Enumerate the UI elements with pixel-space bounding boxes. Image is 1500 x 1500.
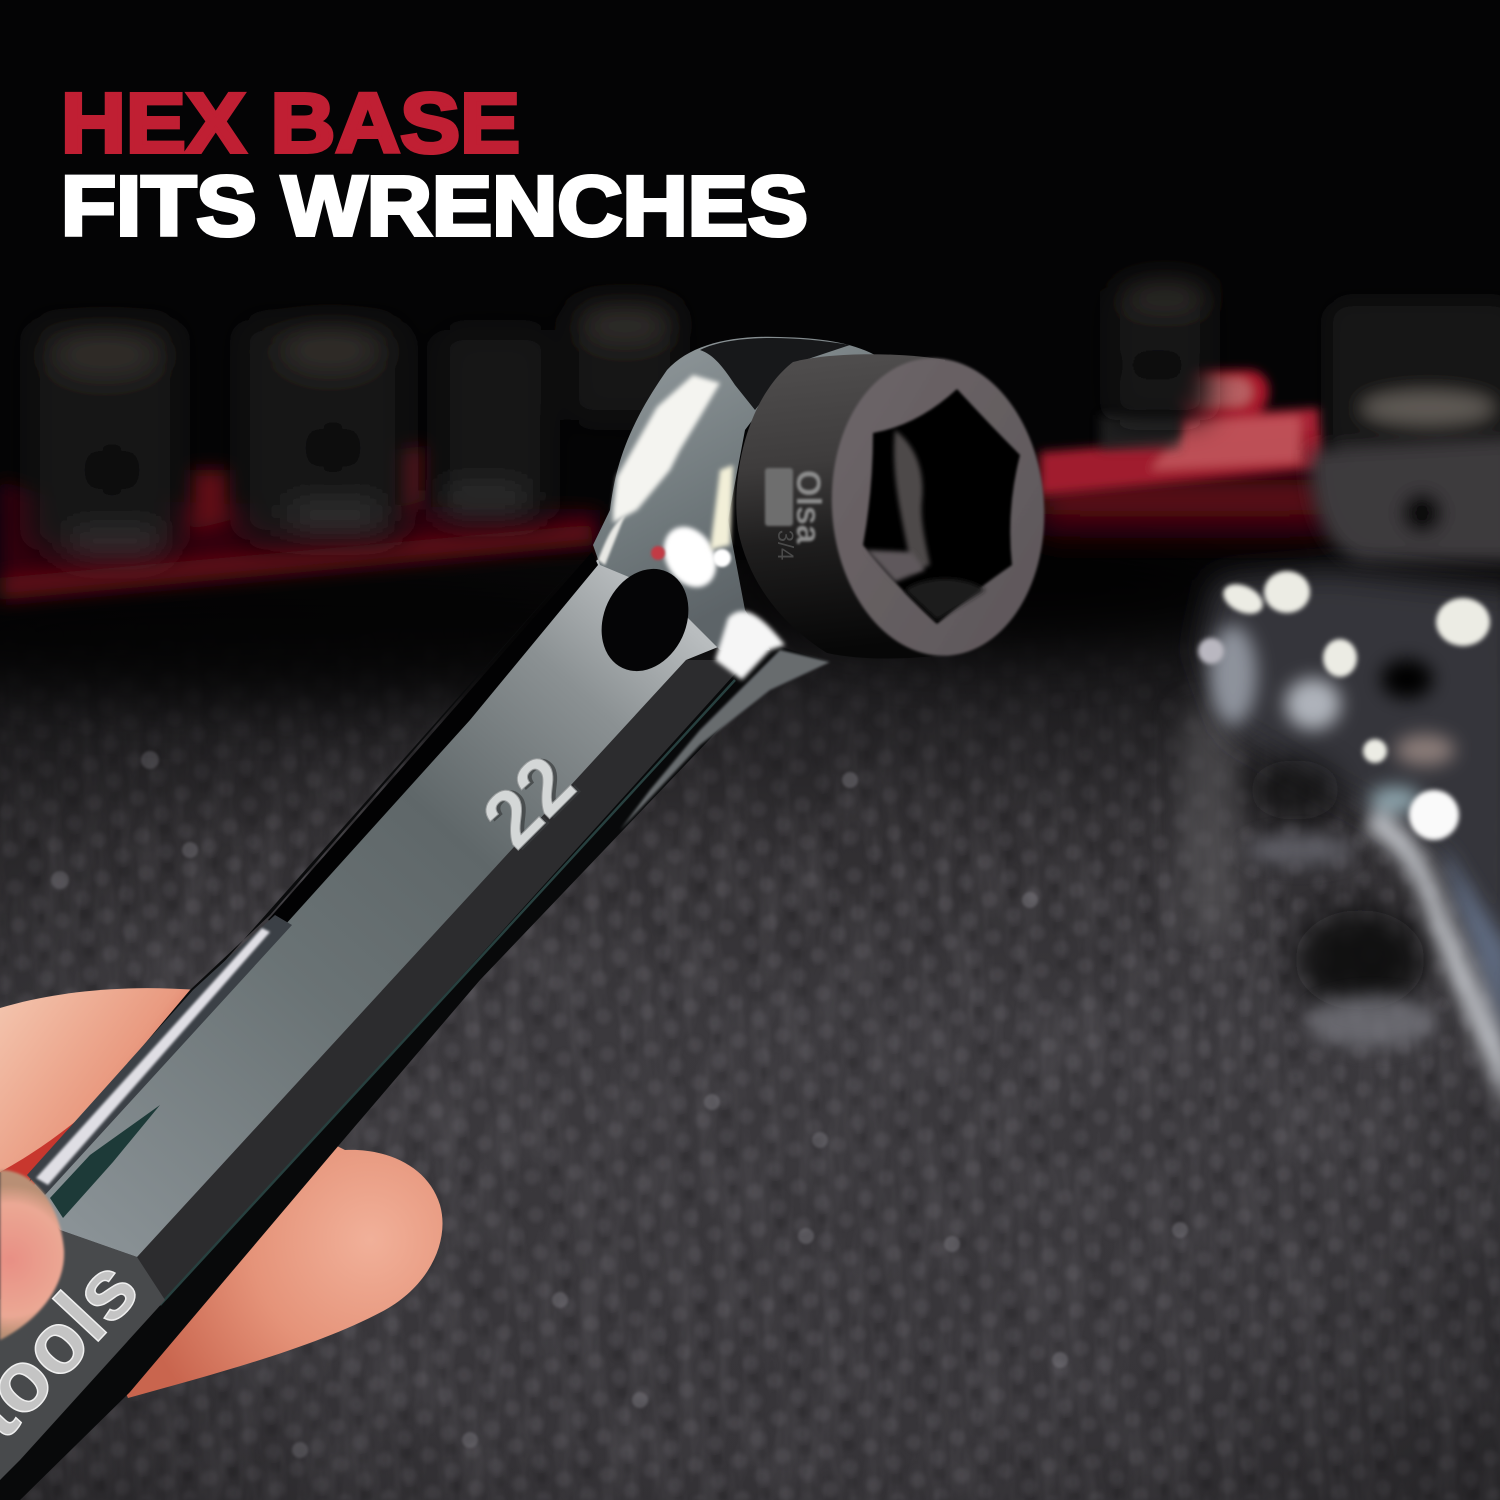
background: blurred socket row — [30, 281, 1210, 556]
socket: outer body — [736, 354, 945, 659]
background: woven mat surface — [0, 530, 1500, 1500]
wrench: lit reflections around hole — [653, 517, 727, 597]
wrench: head chrome — [593, 337, 875, 650]
wrench — [0, 337, 875, 1500]
socket: size marking: 3/4 — [773, 530, 798, 560]
wrench: handle body — [0, 545, 830, 1500]
title: line two: FITS WRENCHES — [61, 159, 808, 253]
wrench: size marking 22: 22 — [465, 738, 591, 864]
wrench: green reflection patch — [50, 1105, 160, 1218]
wrench: dark top of head — [700, 338, 850, 410]
background: blurred socket on ratchet, right — [1310, 300, 1500, 562]
socket: inner floor — [866, 550, 925, 582]
title — [61, 76, 808, 253]
wrench: black upper edge reflection — [268, 552, 598, 925]
background: red socket rail, left — [0, 445, 600, 600]
title: line one: HEX BASE — [61, 76, 520, 170]
background: blurred chrome ratchet, right — [1198, 570, 1500, 1115]
hand: thumb behind wrench — [120, 1140, 443, 1398]
socket: front rim — [822, 351, 1054, 663]
wrench: reflective centre band — [30, 540, 760, 1257]
wrench: dark side strip — [60, 660, 752, 1370]
wrench: head highlight — [613, 375, 720, 523]
hand: thumb in front of wrench — [0, 1170, 64, 1340]
socket: hex opening — [863, 389, 1020, 624]
background: red socket rail, right — [1040, 370, 1330, 540]
socket: size label patch — [765, 468, 793, 526]
wrench: grey bevel at neck — [620, 650, 830, 830]
wrench: panel behind brand marking — [0, 1230, 165, 1480]
wrench: round hole — [585, 555, 705, 685]
socket: engraved brand: Olsa — [789, 470, 827, 545]
wrench: size marking 22: 22 — [470, 738, 595, 864]
wrench: chrome rod along edge — [27, 915, 292, 1195]
socket: inner wall sliver — [894, 430, 930, 572]
wrench: black outer edge — [0, 655, 790, 1500]
hand: fingers behind wrench — [0, 988, 210, 1190]
socket — [736, 351, 1054, 663]
wrench: thin green edge reflection — [160, 680, 735, 1305]
